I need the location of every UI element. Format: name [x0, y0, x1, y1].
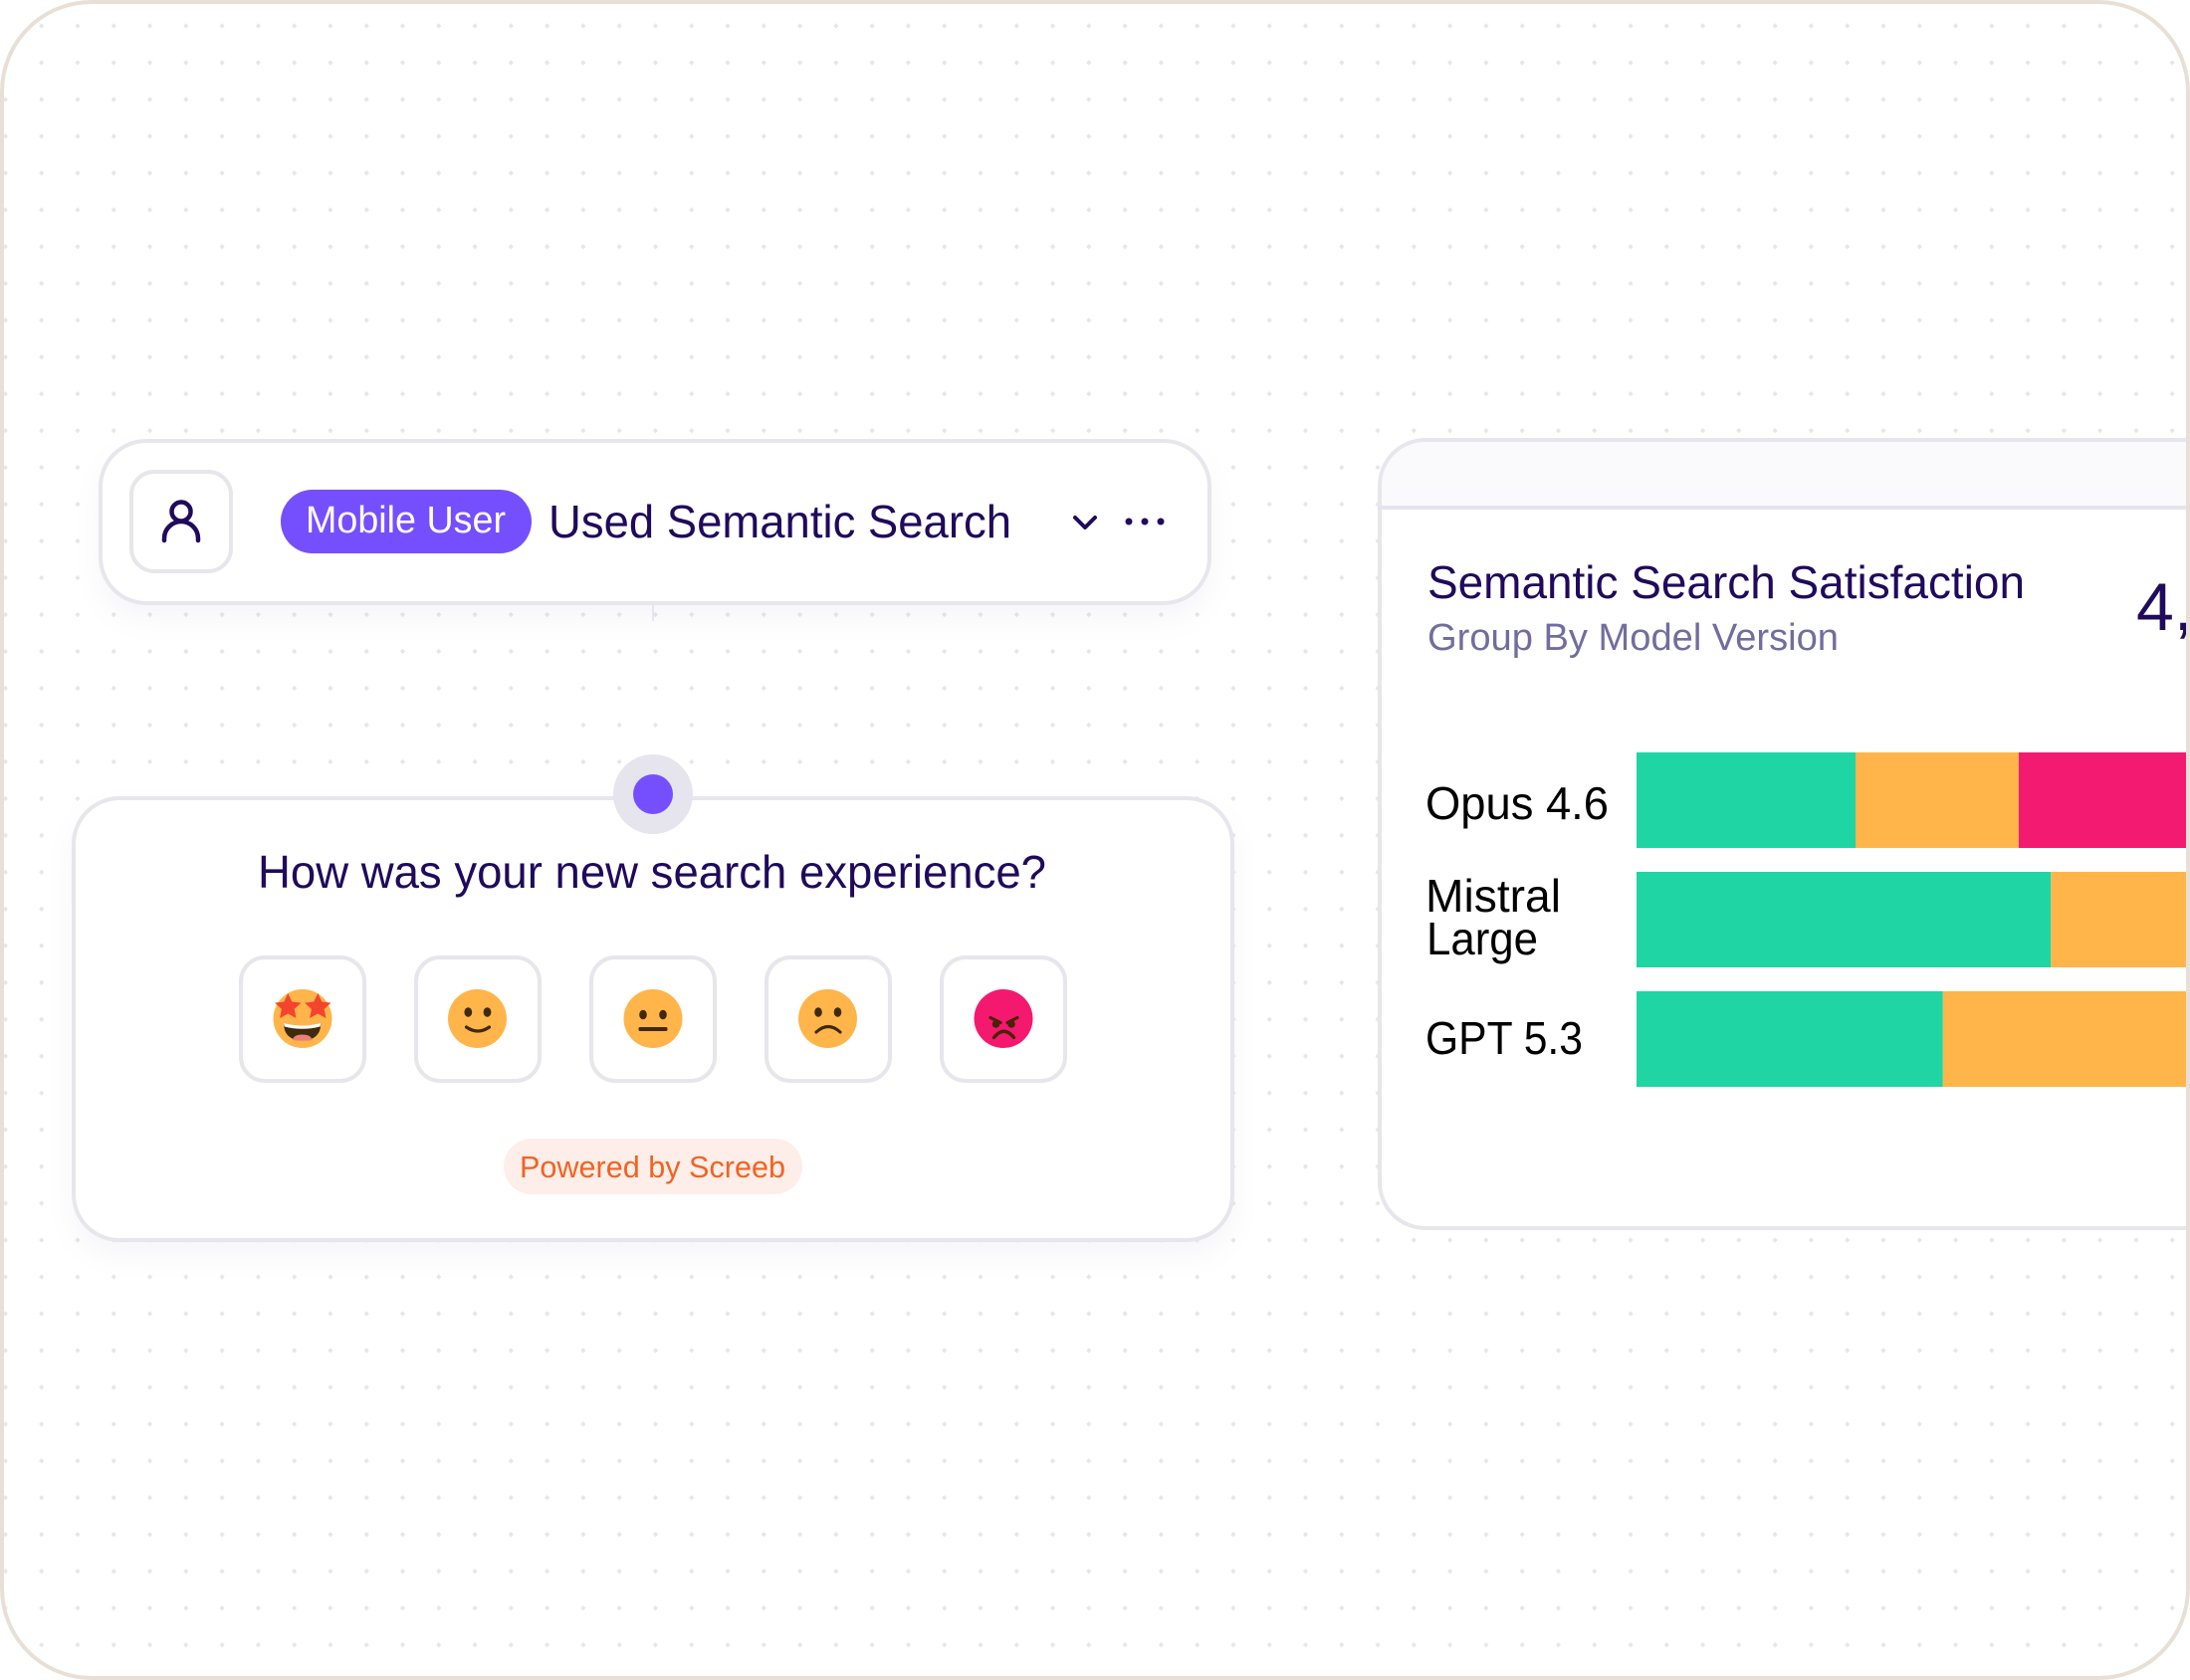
rating option: sad [766, 957, 890, 1081]
badge: mobile user: Mobile User [306, 500, 506, 541]
badge: powered by screeb: Powered by Screeb [520, 1150, 785, 1184]
stacked bar: Opus 4.6: Opus 4.6 [1425, 777, 1609, 829]
stacked bar: GPT 5.3: GPT 5.3 [1425, 1012, 1583, 1064]
panel header bar [1382, 442, 2190, 508]
stacked bar: Mistral Large: Large [1426, 913, 1538, 964]
badge: mobile user [281, 490, 532, 553]
chart title: Semantic Search Satisfaction [1427, 556, 2025, 608]
icon: chevron [1075, 518, 1095, 527]
rating option: star struck [241, 957, 364, 1081]
stacked bar: Mistral Large: Mistral [1425, 870, 1561, 922]
connector node [613, 754, 693, 834]
survey question: How was your new search experience? [258, 846, 1046, 898]
panel: trigger card [101, 441, 1209, 603]
stacked bar: GPT 5.3 [1425, 991, 2186, 1087]
stacked bar: Opus 4.6 [1425, 752, 2186, 848]
rating option: neutral [591, 957, 715, 1081]
icon: more menu [1125, 518, 1165, 525]
rating option: smile [416, 957, 540, 1081]
panel: survey card [74, 754, 1232, 1240]
stacked bar: Mistral Large [1425, 870, 2186, 967]
panel: results chart [1378, 440, 2190, 1228]
event name: Used Semantic Search [548, 496, 1011, 547]
connector tick between trigger card and survey [652, 603, 654, 621]
badge: powered by screeb [504, 1139, 802, 1194]
icon: user avatar [131, 472, 231, 571]
chart subtitle: Group By Model Version [1427, 617, 1839, 659]
rating option: angry [942, 957, 1065, 1081]
